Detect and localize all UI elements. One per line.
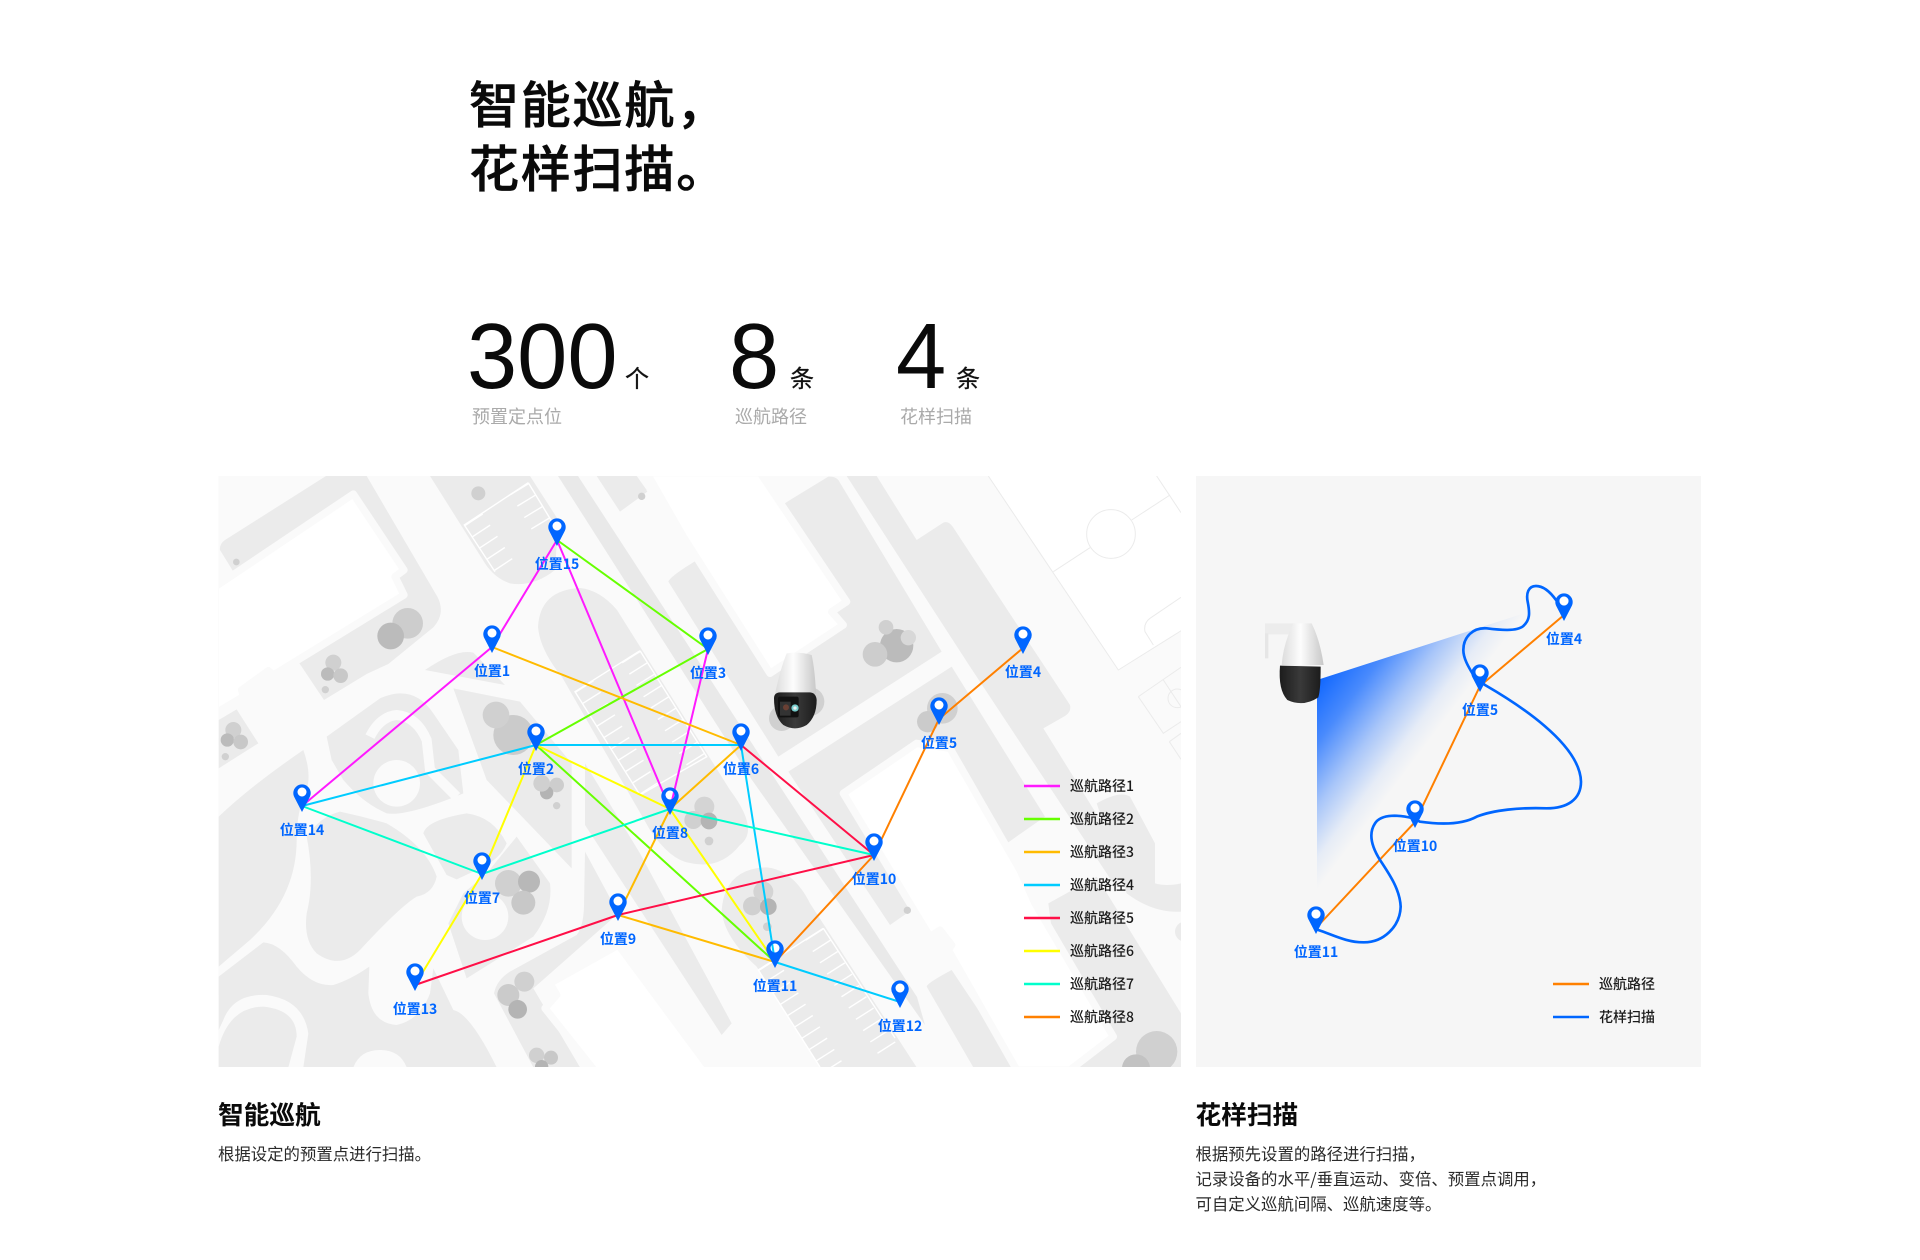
map legend: 巡航路径8 bbox=[1070, 1007, 1134, 1027]
pin: position 10: 位置10 bbox=[852, 869, 896, 889]
camera view cone bbox=[1317, 613, 1525, 890]
caption: smart patrol bbox=[218, 1095, 431, 1165]
pin: position 5 bbox=[921, 697, 957, 753]
scan legend bbox=[1553, 974, 1655, 1027]
scan legend: 巡航路径 bbox=[1599, 974, 1655, 994]
pin: scan position 4 bbox=[1546, 593, 1582, 649]
pin: position 3: 位置3 bbox=[690, 663, 726, 683]
route 1 magenta bbox=[302, 540, 708, 809]
stat: 300 preset points: 预置定点位 bbox=[472, 403, 562, 429]
stat: 8 patrol routes: 巡航路径 bbox=[735, 403, 807, 429]
map legend: 巡航路径6 bbox=[1070, 941, 1134, 961]
stat: 4 pattern scans bbox=[896, 305, 980, 429]
pin: scan position 10 bbox=[1393, 800, 1437, 856]
pin: position 14 bbox=[280, 784, 324, 840]
pin: position 13 bbox=[393, 963, 437, 1019]
stat: 8 patrol routes bbox=[729, 305, 814, 429]
panel: pattern scan bbox=[1196, 476, 1701, 1067]
route 2 green bbox=[536, 540, 775, 962]
caption: smart patrol: 根据设定的预置点进行扫描。 bbox=[218, 1141, 431, 1165]
map legend: 巡航路径3 bbox=[1070, 842, 1134, 862]
pin: scan position 5 bbox=[1462, 664, 1498, 720]
pin: position 8: 位置8 bbox=[652, 823, 688, 843]
pin: position 14: 位置14 bbox=[280, 820, 324, 840]
stat: 300 preset points: 300 bbox=[467, 305, 618, 408]
scan path blue bbox=[1318, 586, 1581, 942]
pin: position 12 bbox=[878, 980, 922, 1036]
pin: position 6 bbox=[723, 723, 759, 779]
stat: 4 pattern scans: 花样扫描 bbox=[900, 403, 972, 429]
caption: pattern scan: 花样扫描 bbox=[1196, 1095, 1298, 1132]
route 6 yellow bbox=[415, 745, 775, 985]
caption: smart patrol: 智能巡航 bbox=[218, 1095, 321, 1132]
pin: position 7 bbox=[464, 852, 500, 908]
pin: position 2 bbox=[518, 723, 554, 779]
scan camera bbox=[1265, 623, 1324, 703]
title bbox=[469, 66, 728, 202]
pin: position 2: 位置2 bbox=[518, 759, 554, 779]
pin: position 10 bbox=[852, 833, 896, 889]
route 4 cyan bbox=[302, 745, 900, 1002]
map legend: 巡航路径7 bbox=[1070, 974, 1134, 994]
pin: position 8 bbox=[652, 787, 688, 843]
map legend: 巡航路径1 bbox=[1070, 776, 1134, 796]
pin: position 11: 位置11 bbox=[753, 976, 797, 996]
pin: scan position 4: 位置4 bbox=[1546, 629, 1582, 649]
pin: position 13: 位置13 bbox=[393, 999, 437, 1019]
stat: 8 patrol routes: 条 bbox=[790, 359, 814, 394]
title: 智能巡航， bbox=[469, 66, 728, 138]
pin: position 3 bbox=[690, 627, 726, 683]
pin holes bbox=[298, 522, 1028, 992]
pin: position 6: 位置6 bbox=[723, 759, 759, 779]
route 5 red bbox=[415, 745, 874, 985]
stat: 300 preset points: 个 bbox=[625, 359, 649, 394]
pin: position 7: 位置7 bbox=[464, 888, 500, 908]
pin: position 4: 位置4 bbox=[1005, 662, 1041, 682]
pin: scan position 10: 位置10 bbox=[1393, 836, 1437, 856]
route 7 teal bbox=[302, 806, 874, 874]
pin: scan position 11: 位置11 bbox=[1294, 942, 1338, 962]
pin: position 1 bbox=[474, 625, 510, 681]
camera on map bbox=[774, 653, 817, 728]
pin: position 9 bbox=[600, 893, 636, 949]
pin: position 12: 位置12 bbox=[878, 1016, 922, 1036]
map legend: 巡航路径4 bbox=[1070, 875, 1134, 895]
scan legend: 花样扫描 bbox=[1599, 1007, 1655, 1027]
pin: position 1: 位置1 bbox=[474, 661, 510, 681]
caption: pattern scan: 根据预先设置的路径进行扫描， bbox=[1196, 1141, 1425, 1165]
stat: 4 pattern scans: 4 bbox=[896, 305, 946, 408]
pin: position 5: 位置5 bbox=[921, 733, 957, 753]
pin: position 15: 位置15 bbox=[535, 554, 579, 574]
caption: pattern scan bbox=[1196, 1095, 1546, 1215]
route 3 gold bbox=[492, 647, 775, 962]
caption: pattern scan: 记录设备的水平/垂直运动、变倍、预置点调用， bbox=[1196, 1166, 1546, 1190]
route 8 orange bbox=[775, 648, 1023, 962]
pin: position 4 bbox=[1005, 626, 1041, 682]
caption: pattern scan: 可自定义巡航间隔、巡航速度等。 bbox=[1196, 1191, 1441, 1215]
title: 花样扫描。 bbox=[469, 130, 728, 202]
stat: 8 patrol routes: 8 bbox=[729, 305, 779, 408]
map legend bbox=[1024, 776, 1134, 1027]
pin: scan position 11 bbox=[1294, 906, 1338, 962]
pin: position 11 bbox=[753, 940, 797, 996]
map legend: 巡航路径5 bbox=[1070, 908, 1134, 928]
stat: 300 preset points bbox=[467, 305, 649, 429]
cruise path orange bbox=[1316, 615, 1564, 928]
pin: position 15 bbox=[535, 518, 579, 574]
pin: scan position 5: 位置5 bbox=[1462, 700, 1498, 720]
panel: smart patrol map bbox=[215, 473, 1195, 1082]
pin: position 9: 位置9 bbox=[600, 929, 636, 949]
stat: 4 pattern scans: 条 bbox=[956, 359, 980, 394]
map legend: 巡航路径2 bbox=[1070, 809, 1134, 829]
routes bbox=[302, 540, 1023, 1002]
